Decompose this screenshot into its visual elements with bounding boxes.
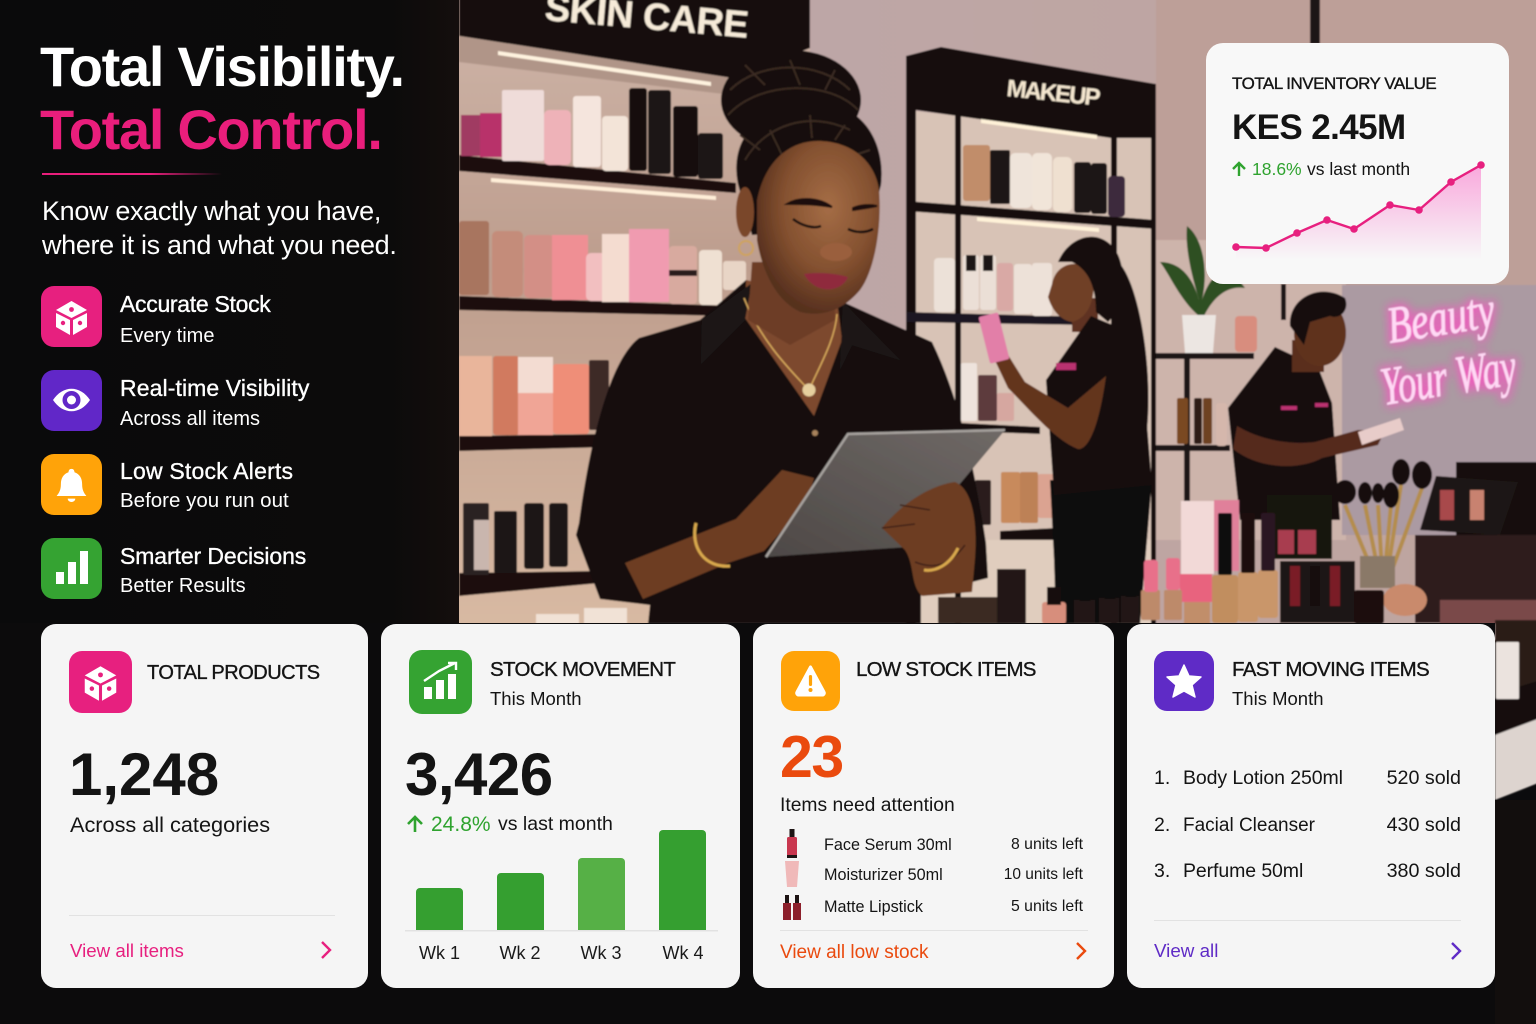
- counter display with cosmetics: [1042, 459, 1536, 624]
- value: 1,248: [69, 741, 219, 808]
- ranked list: 430 sold: [1387, 814, 1461, 836]
- value: 3,426: [405, 741, 553, 808]
- item list: 8 units left: [1011, 836, 1083, 853]
- woman: right hand: [882, 482, 976, 596]
- benefit: smarter decisions: Better Results: [120, 575, 246, 597]
- ranked list: Body Lotion 250ml: [1183, 767, 1343, 789]
- bar chart: [405, 830, 718, 963]
- divider under heading: [42, 173, 222, 175]
- lower dark band: [0, 623, 1495, 1024]
- icon: star: [1154, 651, 1214, 711]
- bar chart: Wk 1: [419, 943, 460, 963]
- bar chart: Wk 3: [580, 943, 622, 963]
- lower right counter: [1495, 620, 1536, 800]
- item list: 10 units left: [1004, 866, 1083, 883]
- trend: 24.8%: [431, 813, 491, 836]
- benefits list: [41, 286, 310, 599]
- benefit: low stock alerts: Low Stock Alerts: [120, 458, 293, 484]
- woman: arms: [625, 470, 814, 599]
- link: View all low stock: [780, 942, 929, 963]
- subtitle: This Month: [1232, 688, 1324, 709]
- benefit: smarter decisions: [41, 538, 306, 599]
- panel: stock movement: [381, 624, 740, 988]
- caption: Across all categories: [70, 812, 270, 837]
- benefit: real-time visibility: Across all items: [120, 408, 260, 430]
- staff member reading a box: [978, 237, 1152, 624]
- background walls: [430, 0, 1536, 640]
- trend: 18.6%: [1252, 159, 1302, 179]
- benefit: real-time visibility: Real-time Visibility: [120, 375, 309, 401]
- link: View all items: [70, 940, 184, 961]
- ranked list: [1154, 767, 1461, 882]
- benefit: accurate stock: Every time: [120, 325, 214, 347]
- value: 23: [780, 724, 843, 790]
- neon sign: Beauty: [1383, 282, 1499, 355]
- item list: [783, 829, 1083, 920]
- icon: lipstick pair: [783, 895, 801, 920]
- benefit: real-time visibility: [41, 370, 310, 431]
- chevron: [321, 941, 332, 959]
- left dark panel: [0, 0, 459, 1024]
- benefit: smarter decisions: Smarter Decisions: [120, 543, 306, 569]
- makeup shelving: MAKEUP: [1005, 75, 1102, 112]
- tagline: [42, 196, 397, 260]
- heading: [40, 35, 404, 161]
- value: KES 2.45M: [1232, 108, 1406, 147]
- item list: Matte Lipstick: [824, 898, 923, 916]
- item list: 5 units left: [1011, 898, 1083, 915]
- ranked list: 380 sold: [1387, 860, 1461, 882]
- icon: cube: [69, 651, 132, 713]
- ranked list: 2.: [1154, 814, 1170, 836]
- caption: Items need attention: [780, 795, 955, 816]
- icon: rising bars: [409, 650, 472, 714]
- chevron: [1076, 942, 1087, 960]
- icon: serum bottle: [787, 829, 797, 858]
- ranked list: 1.: [1154, 767, 1170, 789]
- icon: cube: [41, 286, 102, 347]
- panel: total inventory value: [1206, 43, 1509, 284]
- makeup shelving: [906, 47, 1156, 630]
- woman: head and face: [736, 141, 880, 345]
- bar chart: Wk 2: [499, 943, 541, 963]
- panel: total products: [41, 624, 368, 988]
- benefit: low stock alerts: [41, 454, 293, 515]
- icon: bell: [41, 454, 102, 515]
- tagline: where it is and what you need.: [42, 230, 397, 260]
- icon: bar chart: [41, 538, 102, 599]
- side plant and shelf: [1156, 226, 1257, 509]
- benefit: accurate stock: Accurate Stock: [120, 291, 270, 317]
- benefit: low stock alerts: Before you run out: [120, 489, 289, 512]
- label: TOTAL INVENTORY VALUE: [1232, 74, 1436, 93]
- icon: eye: [41, 370, 102, 431]
- item list: Face Serum 30ml: [824, 836, 952, 854]
- trend: [407, 813, 613, 836]
- panel: low stock items: [753, 624, 1114, 988]
- tagline: Know exactly what you have,: [42, 196, 381, 226]
- staff member with tablet: [1228, 292, 1404, 520]
- title: LOW STOCK ITEMS: [856, 658, 1036, 681]
- benefit: accurate stock: [41, 286, 272, 347]
- neon sign: [1376, 282, 1520, 417]
- heading: Total Visibility.: [40, 35, 404, 98]
- heading: Total Control.: [40, 98, 382, 161]
- ranked list: Perfume 50ml: [1183, 860, 1303, 882]
- ranked list: 3.: [1154, 860, 1170, 882]
- woman: tablet: [766, 430, 1005, 557]
- link: View all: [1154, 940, 1218, 961]
- brushes in cup: [1345, 485, 1422, 570]
- panel: fast moving items: [1127, 624, 1495, 988]
- ranked list: Facial Cleanser: [1183, 815, 1315, 836]
- icon: warning: [781, 651, 840, 711]
- woman: hair bun: [721, 50, 882, 235]
- skin care shelving: [458, 0, 810, 624]
- bar chart: Wk 4: [662, 943, 704, 963]
- item list: Moisturizer 50ml: [824, 866, 943, 884]
- trend: vs last month: [1307, 159, 1410, 179]
- trend: vs last month: [498, 813, 613, 835]
- icon: moisturizer tube: [785, 861, 799, 887]
- title: STOCK MOVEMENT: [490, 658, 675, 681]
- title: TOTAL PRODUCTS: [147, 662, 320, 684]
- woman: shirt and body: [576, 280, 988, 624]
- line chart: [1232, 161, 1485, 252]
- chevron: [1451, 942, 1462, 960]
- title: FAST MOVING ITEMS: [1232, 658, 1429, 681]
- subtitle: This Month: [490, 688, 582, 709]
- ranked list: 520 sold: [1387, 767, 1461, 789]
- trend: [1232, 159, 1410, 179]
